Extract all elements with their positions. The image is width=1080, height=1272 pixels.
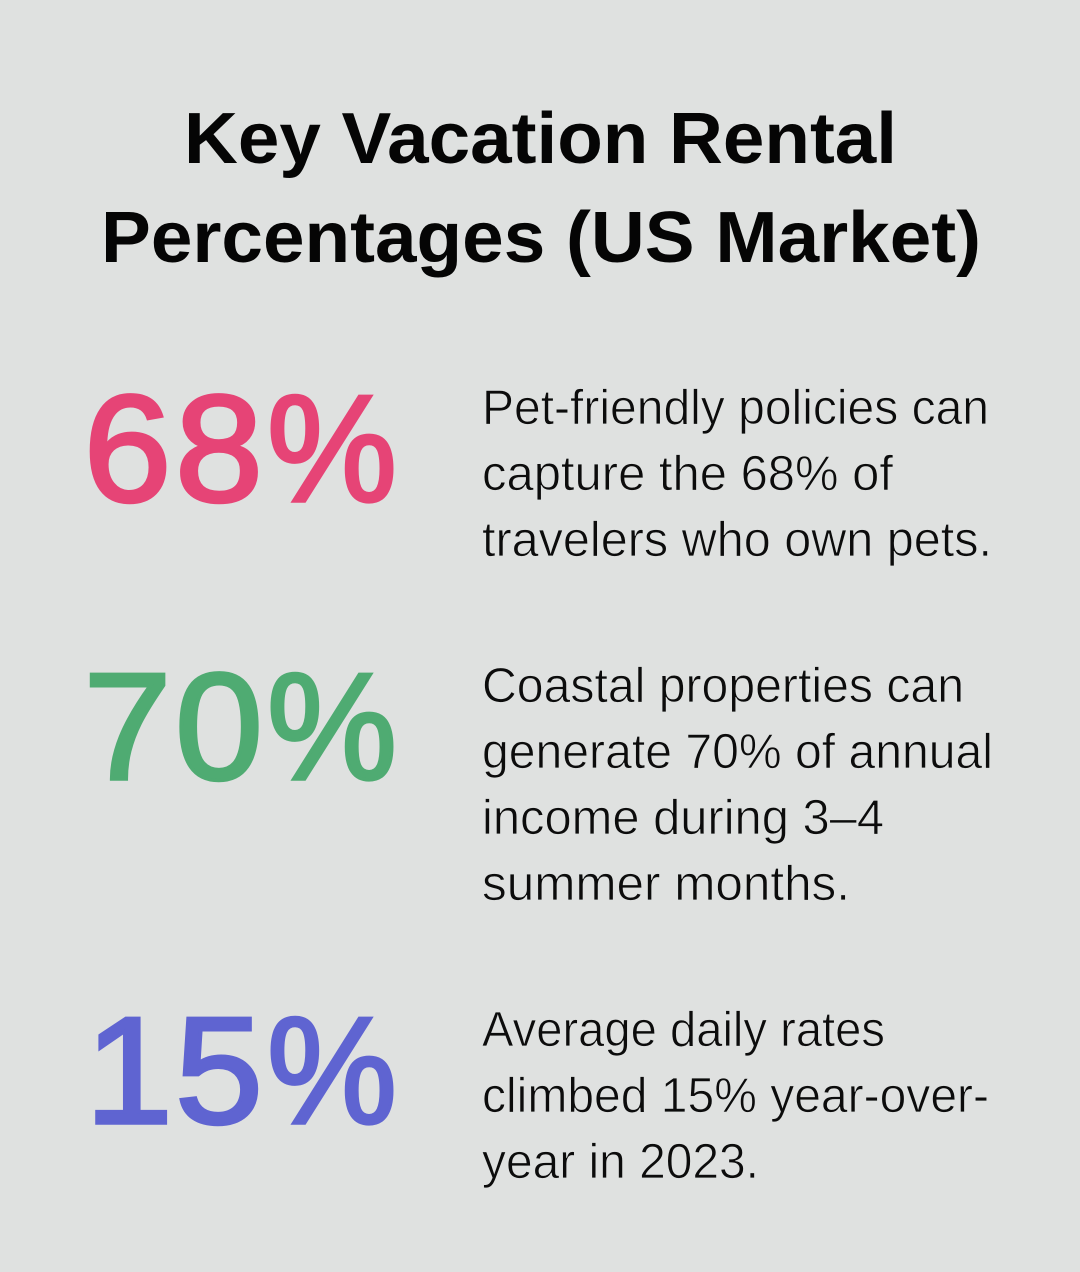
number: 15%: 1 <box>85 986 173 1156</box>
description: average daily rates <box>482 1003 989 1189</box>
title: Percentages (US Market) <box>101 198 981 278</box>
stat: 68% pet-friendly <box>84 364 992 567</box>
number: 70%: % <box>267 642 397 812</box>
number: 68% <box>84 364 397 534</box>
description: pet-friendly policies <box>482 381 992 567</box>
description: coastal properties: generate 70% of annual <box>482 725 993 779</box>
title <box>101 99 981 278</box>
number: 70% <box>84 642 397 812</box>
title: Key Vacation Rental <box>184 99 897 179</box>
description: coastal properties: Coastal properties can <box>482 659 964 713</box>
description: pet-friendly policies: capture the 68% of <box>482 447 893 501</box>
description: coastal properties: income during 3–4 <box>482 791 884 845</box>
stat: 70% coastal <box>84 642 993 911</box>
description: pet-friendly policies: travelers who own pets. <box>482 513 992 567</box>
number: 68%: 8 <box>175 364 263 534</box>
number: 70%: 7 <box>84 642 172 812</box>
number: 68%: % <box>267 364 397 534</box>
stat: 15% daily rates <box>85 986 989 1189</box>
description: pet-friendly policies: Pet-friendly policies can <box>482 381 989 435</box>
description: coastal properties <box>482 659 993 911</box>
description: coastal properties: summer months. <box>482 857 850 911</box>
number: 15%: % <box>267 986 397 1156</box>
number: 15% <box>85 986 397 1156</box>
description: average daily rates: climbed 15% year-over- <box>482 1069 989 1123</box>
description: average daily rates: Average daily rates <box>482 1003 885 1057</box>
number: 70%: 0 <box>175 642 263 812</box>
description: average daily rates: year in 2023. <box>482 1135 759 1189</box>
number: 15%: 5 <box>175 986 263 1156</box>
number: 68%: 6 <box>84 364 172 534</box>
